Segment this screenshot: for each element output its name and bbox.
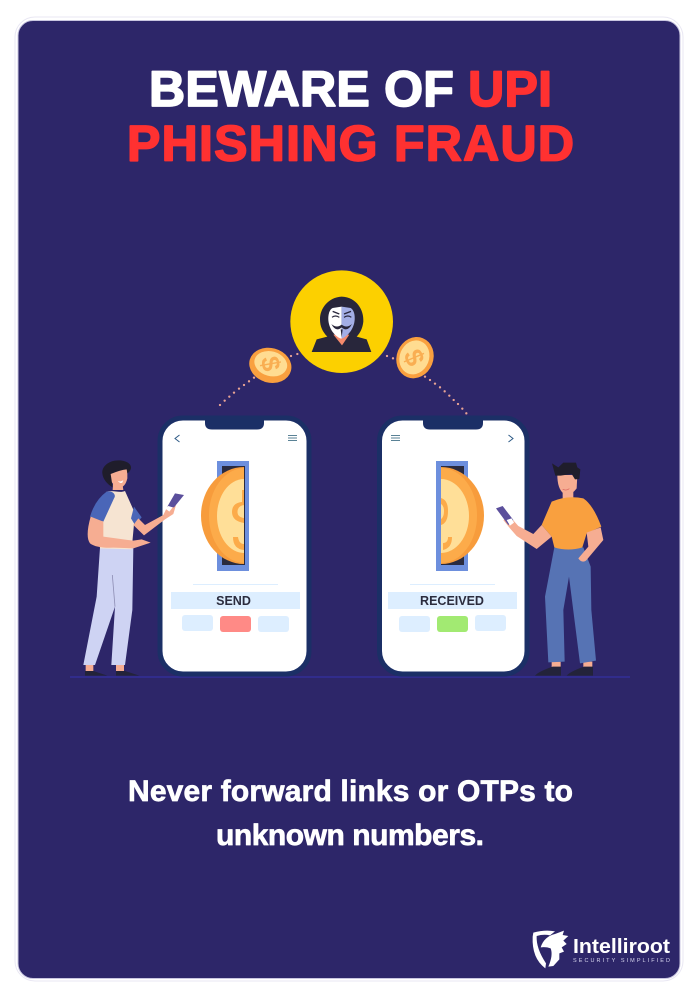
person: woman with phone [83, 460, 184, 676]
phone: received [380, 418, 527, 674]
dotted path: sender to hacker [219, 353, 298, 406]
icon: hacker in yellow circle [290, 270, 393, 373]
buttons [399, 616, 430, 632]
coin slot [217, 461, 249, 571]
phone: send: SEND [216, 594, 251, 608]
send label bar [193, 584, 278, 586]
icon: left coin: $ [255, 354, 287, 374]
coin slot [436, 461, 468, 571]
illustration: hacker and coin transfer [219, 270, 467, 414]
icon: right coin: $ [397, 345, 431, 370]
icon: left coin [245, 343, 295, 388]
half coin [441, 467, 484, 564]
phone: send [160, 418, 309, 674]
title: BEWARE OF UPI [149, 61, 552, 117]
logo: Intelliroot: SECURITY SIMPLIFIED [573, 958, 670, 964]
dotted path: hacker to receiver [386, 355, 467, 414]
phone: received: RECEIVED [420, 594, 484, 608]
title [127, 61, 574, 172]
icon: eagle shield [533, 931, 568, 968]
icon: right coin [390, 331, 440, 384]
received label bar [410, 584, 495, 586]
title: PHISHING FRAUD [127, 116, 574, 172]
half coin [201, 467, 244, 564]
logo: Intelliroot: Intelliroot [573, 936, 670, 958]
icon: back arrow [175, 435, 180, 442]
ground line [70, 676, 630, 678]
message text: unknown numbers. [216, 819, 484, 852]
message text: Never forward links or OTPs to [128, 775, 573, 808]
logo: Intelliroot [533, 931, 670, 968]
buttons [182, 615, 213, 631]
person: man with phone [496, 463, 603, 676]
message text [128, 775, 573, 852]
icon: forward arrow [508, 435, 513, 442]
icon: menu [288, 436, 297, 440]
icon: menu [391, 436, 400, 440]
